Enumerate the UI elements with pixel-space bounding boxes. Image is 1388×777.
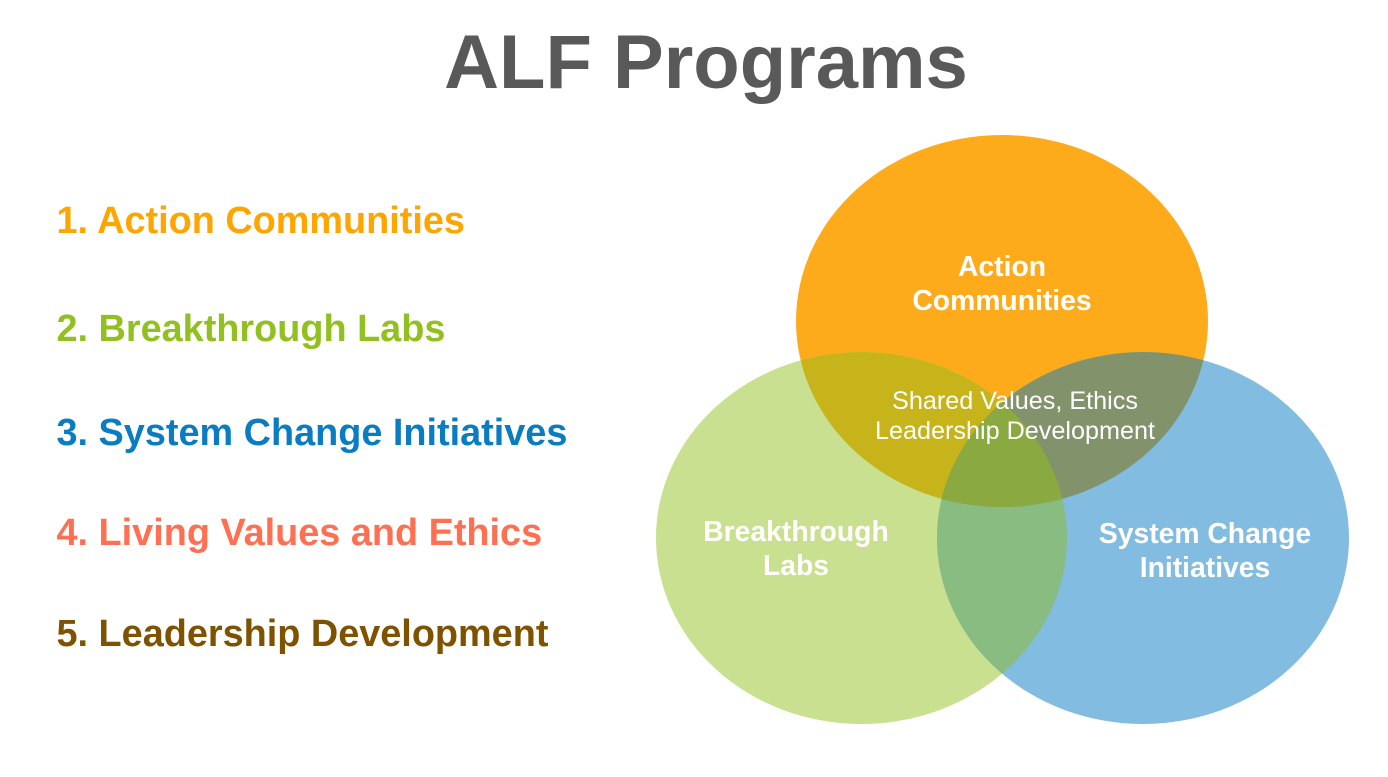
item 1: 1. Action Communities bbox=[56, 200, 465, 242]
label: shared values: Leadership Development bbox=[875, 417, 1155, 445]
circle: breakthrough labs bbox=[656, 352, 1067, 724]
item 2: 2. Breakthrough Labs bbox=[56, 308, 445, 350]
overlap: orange and blue bbox=[942, 352, 1204, 507]
label: action communities bbox=[912, 250, 1092, 316]
venn diagram bbox=[656, 135, 1349, 724]
label: action communities: Communities bbox=[912, 284, 1092, 316]
label: action communities: Action bbox=[958, 250, 1046, 282]
item 5: 5. Leadership Development bbox=[56, 613, 548, 655]
label: shared values: Shared Values, Ethics bbox=[892, 387, 1138, 415]
overlap: green and blue bbox=[937, 499, 1067, 674]
label: system change initiatives: Initiatives bbox=[1140, 551, 1270, 583]
overlap: orange and green bbox=[800, 352, 1062, 507]
label: breakthrough labs bbox=[703, 515, 889, 581]
item 4: 4. Living Values and Ethics bbox=[56, 512, 542, 554]
label: breakthrough labs: Labs bbox=[763, 549, 829, 581]
label: breakthrough labs: Breakthrough bbox=[703, 515, 889, 547]
label: shared values bbox=[875, 387, 1155, 445]
item 3: 3. System Change Initiatives bbox=[56, 412, 567, 454]
circle: system change initiatives bbox=[937, 352, 1349, 724]
overlap: all three bbox=[942, 402, 1062, 507]
program list bbox=[56, 200, 567, 655]
circle: action communities bbox=[796, 135, 1208, 507]
title: ALF Programs bbox=[444, 20, 968, 105]
label: system change initiatives: System Change bbox=[1099, 517, 1311, 549]
label: system change initiatives bbox=[1099, 517, 1311, 583]
